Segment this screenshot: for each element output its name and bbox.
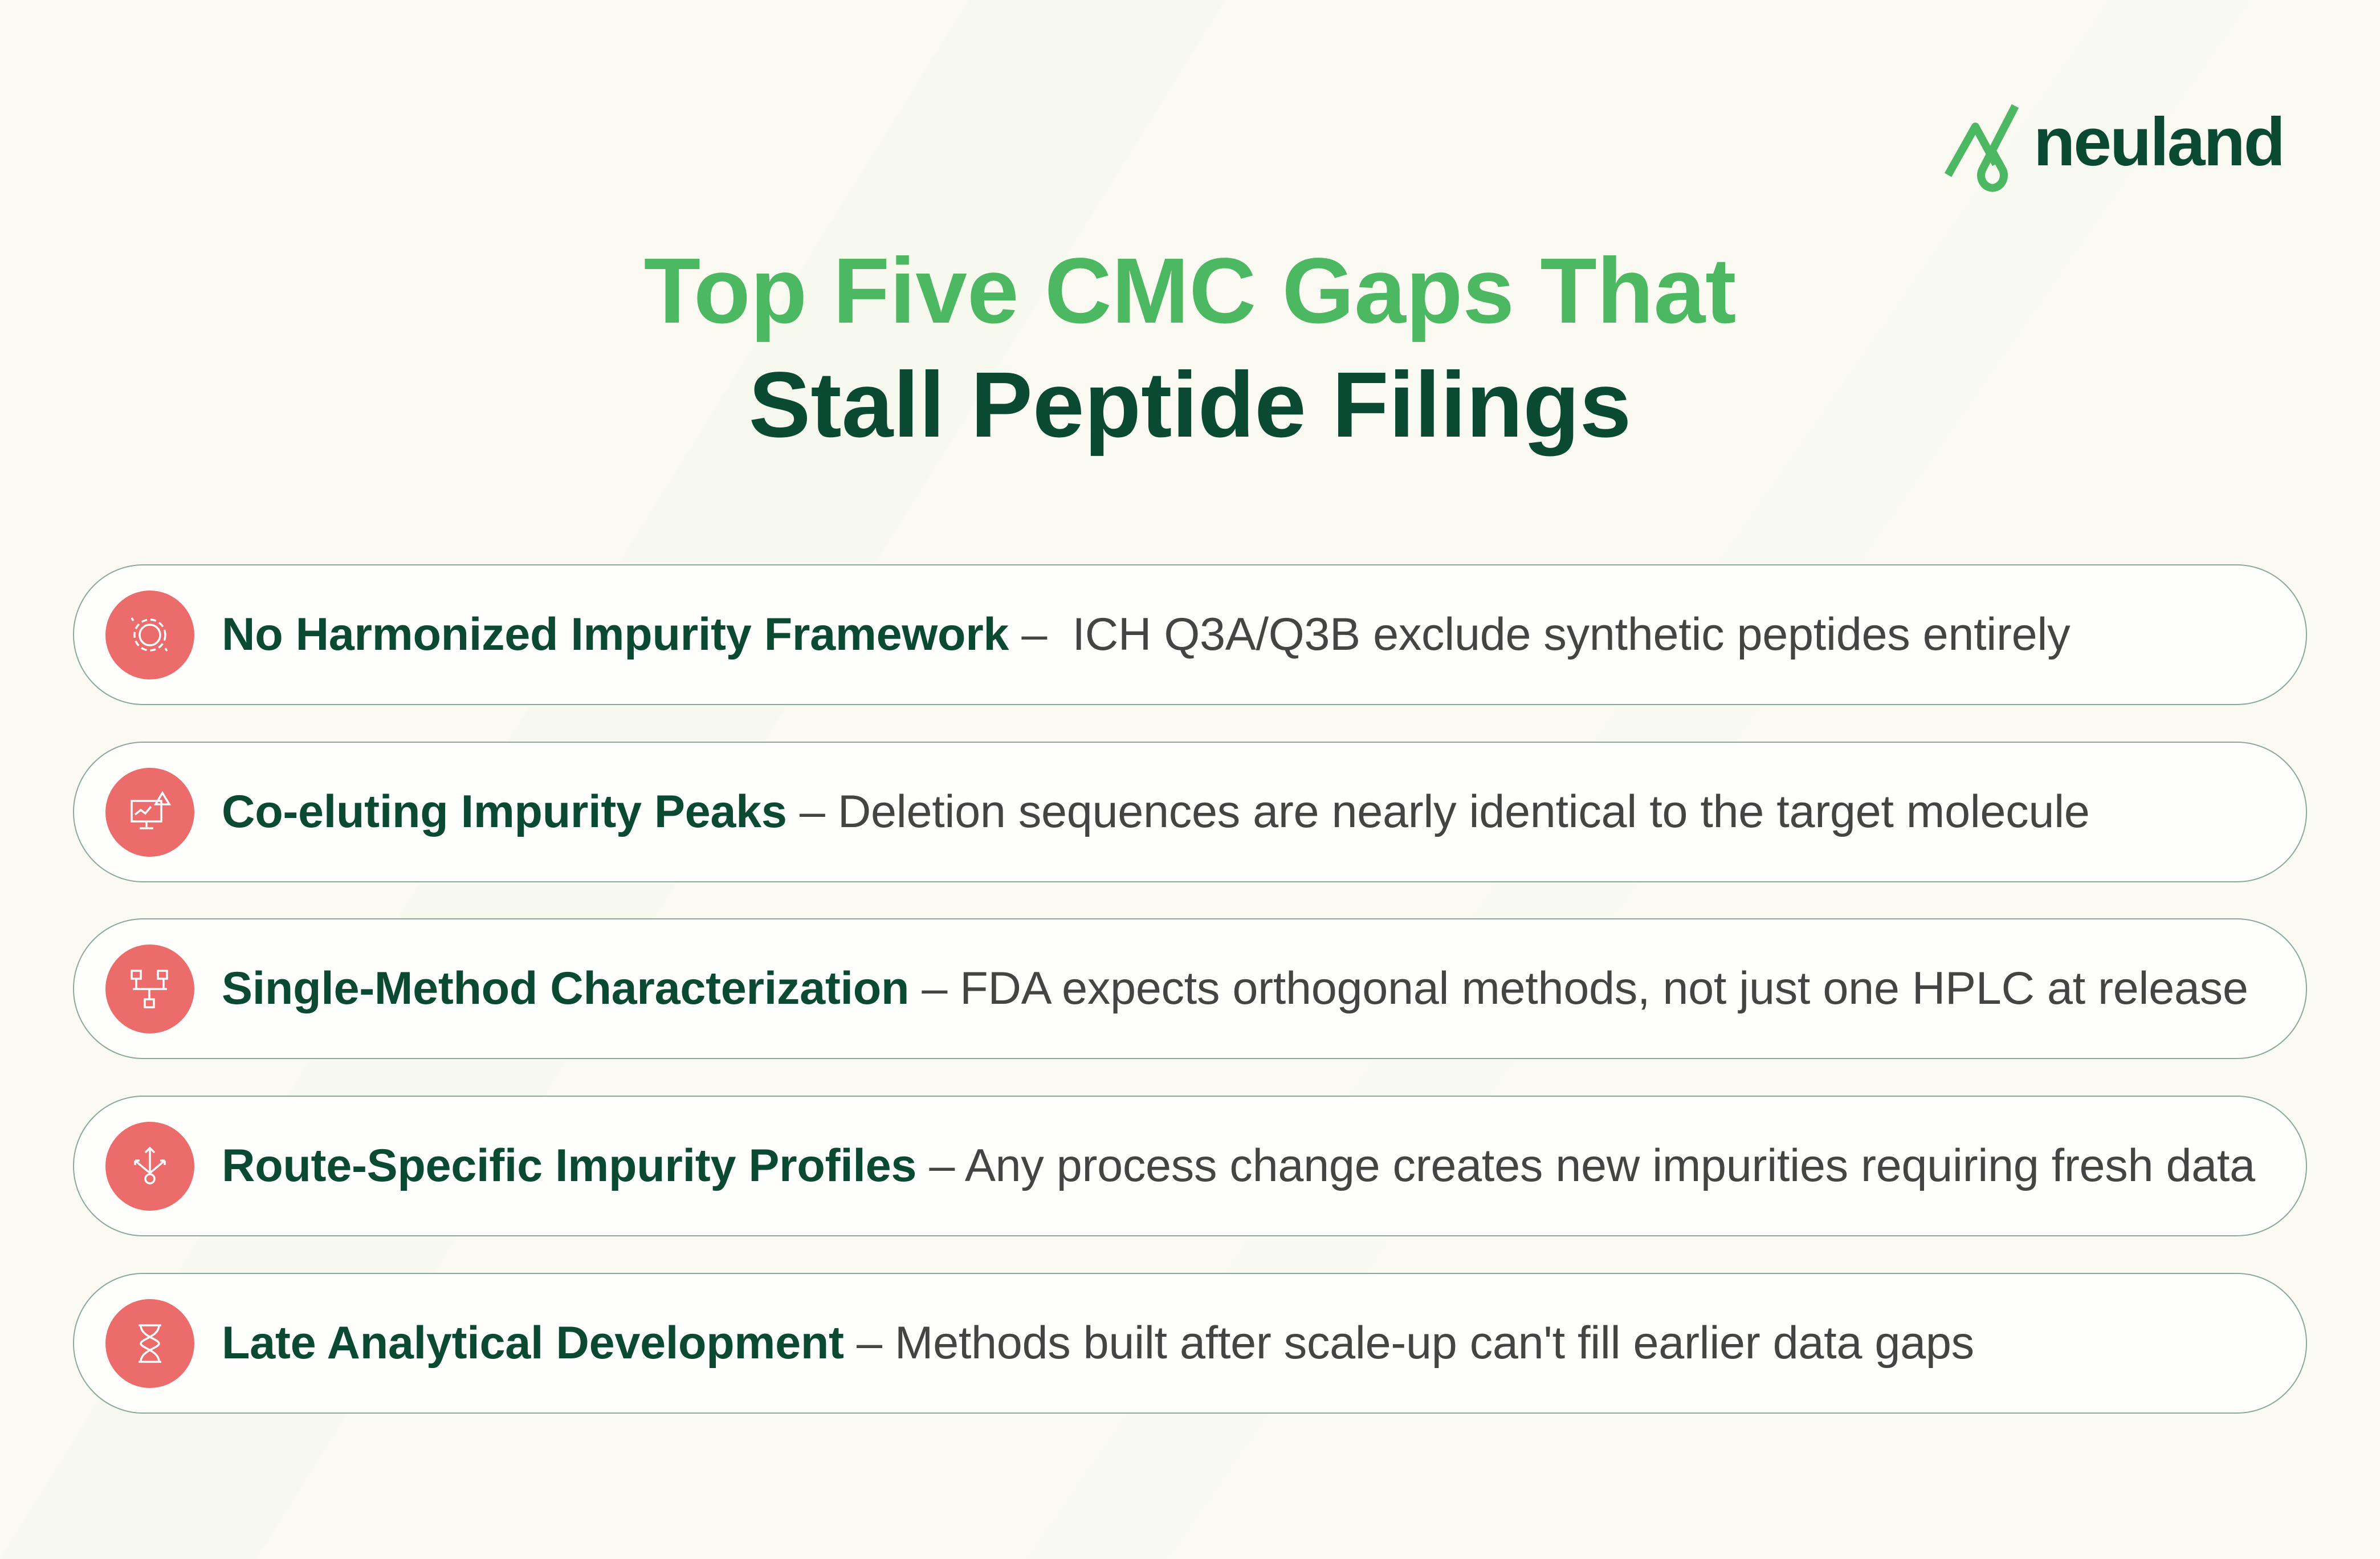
logo: neuland (2033, 104, 2284, 180)
icon: route split (105, 1122, 194, 1211)
panel: row 3 (73, 918, 2307, 1059)
text: Single-Method Characterization – FDA expects orthogonal methods, not just one HPLC at release (222, 963, 2248, 1014)
title (644, 238, 1736, 457)
icon: hourglass (105, 1299, 194, 1388)
title: Top Five CMC Gaps That (644, 238, 1736, 343)
title: Stall Peptide Filings (749, 352, 1631, 457)
icon: monitor alert (105, 768, 194, 857)
text: Late Analytical Development – Methods built after scale-up can't fill earlier data gaps (222, 1317, 1974, 1369)
text: No Harmonized Impurity Framework – ICH Q3A/Q3B exclude synthetic peptides entirely (222, 609, 2070, 660)
panel: row 1 (73, 564, 2307, 705)
icon: flow diagram (105, 945, 194, 1033)
icon: gear (105, 591, 194, 679)
panel: row 2 (73, 742, 2307, 882)
panel: row 4 (73, 1096, 2307, 1236)
logo (1945, 104, 2284, 192)
text: Route-Specific Impurity Profiles – Any process change creates new impurities requiring fresh data (222, 1140, 2255, 1191)
text: Co-eluting Impurity Peaks – Deletion sequences are nearly identical to the target molecule (222, 786, 2090, 837)
panel: row 5 (73, 1273, 2307, 1414)
